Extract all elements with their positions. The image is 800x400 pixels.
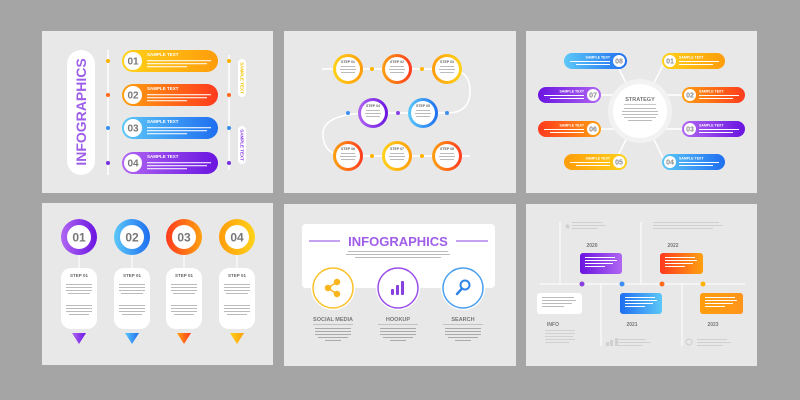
- side label 1: [238, 59, 246, 97]
- step 03: [166, 219, 202, 344]
- step 04: 04: [230, 230, 244, 244]
- pill 06: [538, 121, 601, 137]
- title pill: INFOGRAPHICS: [73, 58, 89, 166]
- panel: timeline: ★: [564, 222, 571, 231]
- center circle: STRATEGY: [625, 97, 655, 103]
- bar 03: [106, 117, 231, 139]
- bar 02: 02: [127, 90, 139, 102]
- title card: [302, 224, 495, 288]
- side label 2: [238, 126, 246, 164]
- step 02: [114, 219, 150, 344]
- bar 01: 01: [127, 56, 139, 68]
- step texts: STEP 07: [390, 147, 404, 151]
- bar 02: SAMPLE TEXT: [147, 86, 179, 91]
- step texts: STEP 03: [440, 60, 454, 64]
- panel: icons: [284, 204, 516, 366]
- pill 07: SAMPLE TEXT: [559, 90, 585, 94]
- pill 01: SAMPLE TEXT: [679, 56, 704, 60]
- step 04: STEP 01: [228, 273, 246, 278]
- step 03: STEP 01: [175, 273, 193, 278]
- pill 04: SAMPLE TEXT: [679, 156, 704, 160]
- pill 03: SAMPLE TEXT: [699, 124, 724, 128]
- pill 08: 08: [615, 58, 623, 66]
- step circles: [333, 54, 462, 171]
- box 2022: [660, 253, 703, 274]
- step 02: STEP 01: [123, 273, 141, 278]
- step 01: STEP 01: [70, 273, 88, 278]
- bar 01: SAMPLE TEXT: [147, 52, 179, 57]
- box info: [537, 293, 582, 314]
- step texts: [341, 60, 454, 151]
- pill 07: [538, 87, 601, 103]
- pill 02: 02: [686, 92, 694, 100]
- pill 05: 05: [615, 160, 623, 166]
- pill 04: 04: [666, 160, 674, 166]
- side label 2: SAMPLE TEXT: [240, 129, 244, 161]
- pill 05: [564, 154, 627, 170]
- pill 02: SAMPLE TEXT: [699, 90, 724, 94]
- bar 04: 04: [127, 158, 139, 170]
- bar 04: SAMPLE TEXT: [147, 154, 179, 159]
- step 02: 02: [125, 230, 139, 244]
- year labels: INFO: [547, 322, 559, 328]
- step texts: STEP 01: [341, 60, 355, 64]
- pill 04: [662, 154, 725, 170]
- labels: SEARCH: [451, 317, 475, 323]
- bar 04: [106, 152, 231, 174]
- box 2023: [700, 293, 743, 314]
- pill 08: [564, 53, 627, 69]
- icon: share: [311, 266, 355, 310]
- pill 07: 07: [589, 92, 597, 100]
- step texts: STEP 06: [341, 147, 355, 151]
- pill 01: 01: [666, 58, 674, 66]
- icon: chart: [376, 266, 420, 310]
- panel: snake process: [284, 31, 516, 193]
- bar 03: 03: [127, 124, 139, 134]
- side label 1: SAMPLE TEXT: [240, 62, 244, 94]
- step 04: [219, 219, 255, 344]
- bar 02: [106, 84, 231, 106]
- timeline dots: [580, 282, 706, 286]
- step texts: STEP 08: [440, 147, 454, 151]
- labels: [313, 317, 475, 323]
- year labels: 2023: [707, 322, 719, 328]
- pill 06: 06: [589, 126, 597, 134]
- step texts: STEP 02: [390, 60, 404, 64]
- pill 02: [682, 87, 745, 103]
- year labels: [547, 243, 719, 328]
- pill 03: [682, 121, 745, 137]
- year labels: 2022: [667, 243, 679, 249]
- step texts: STEP 04: [366, 104, 380, 108]
- labels: HOOKUP: [386, 317, 410, 323]
- bar 01: [106, 50, 231, 72]
- pill 06: SAMPLE TEXT: [559, 124, 585, 128]
- panel: strategy: [526, 31, 757, 193]
- panel: vertical list: [42, 31, 273, 193]
- box 2020: [580, 253, 622, 274]
- panel: steps: [42, 203, 273, 365]
- pill 03: 03: [686, 126, 694, 134]
- pill 08: SAMPLE TEXT: [585, 56, 611, 60]
- step 01: [61, 219, 97, 344]
- title pill: [67, 50, 95, 175]
- pill 05: SAMPLE TEXT: [585, 156, 611, 160]
- step 03: 03: [177, 230, 191, 244]
- center circle: [608, 79, 672, 143]
- year labels: 2021: [626, 322, 638, 328]
- step 01: 01: [72, 230, 86, 244]
- pill 01: [662, 53, 725, 69]
- panel: timeline: [526, 204, 757, 366]
- title card: INFOGRAPHICS: [348, 234, 448, 249]
- icon: search: [441, 266, 485, 310]
- bar 03: SAMPLE TEXT: [147, 119, 179, 124]
- step texts: STEP 05: [416, 104, 430, 108]
- year labels: 2020: [586, 243, 598, 249]
- box 2021: [620, 293, 662, 314]
- labels: SOCIAL MEDIA: [313, 317, 353, 323]
